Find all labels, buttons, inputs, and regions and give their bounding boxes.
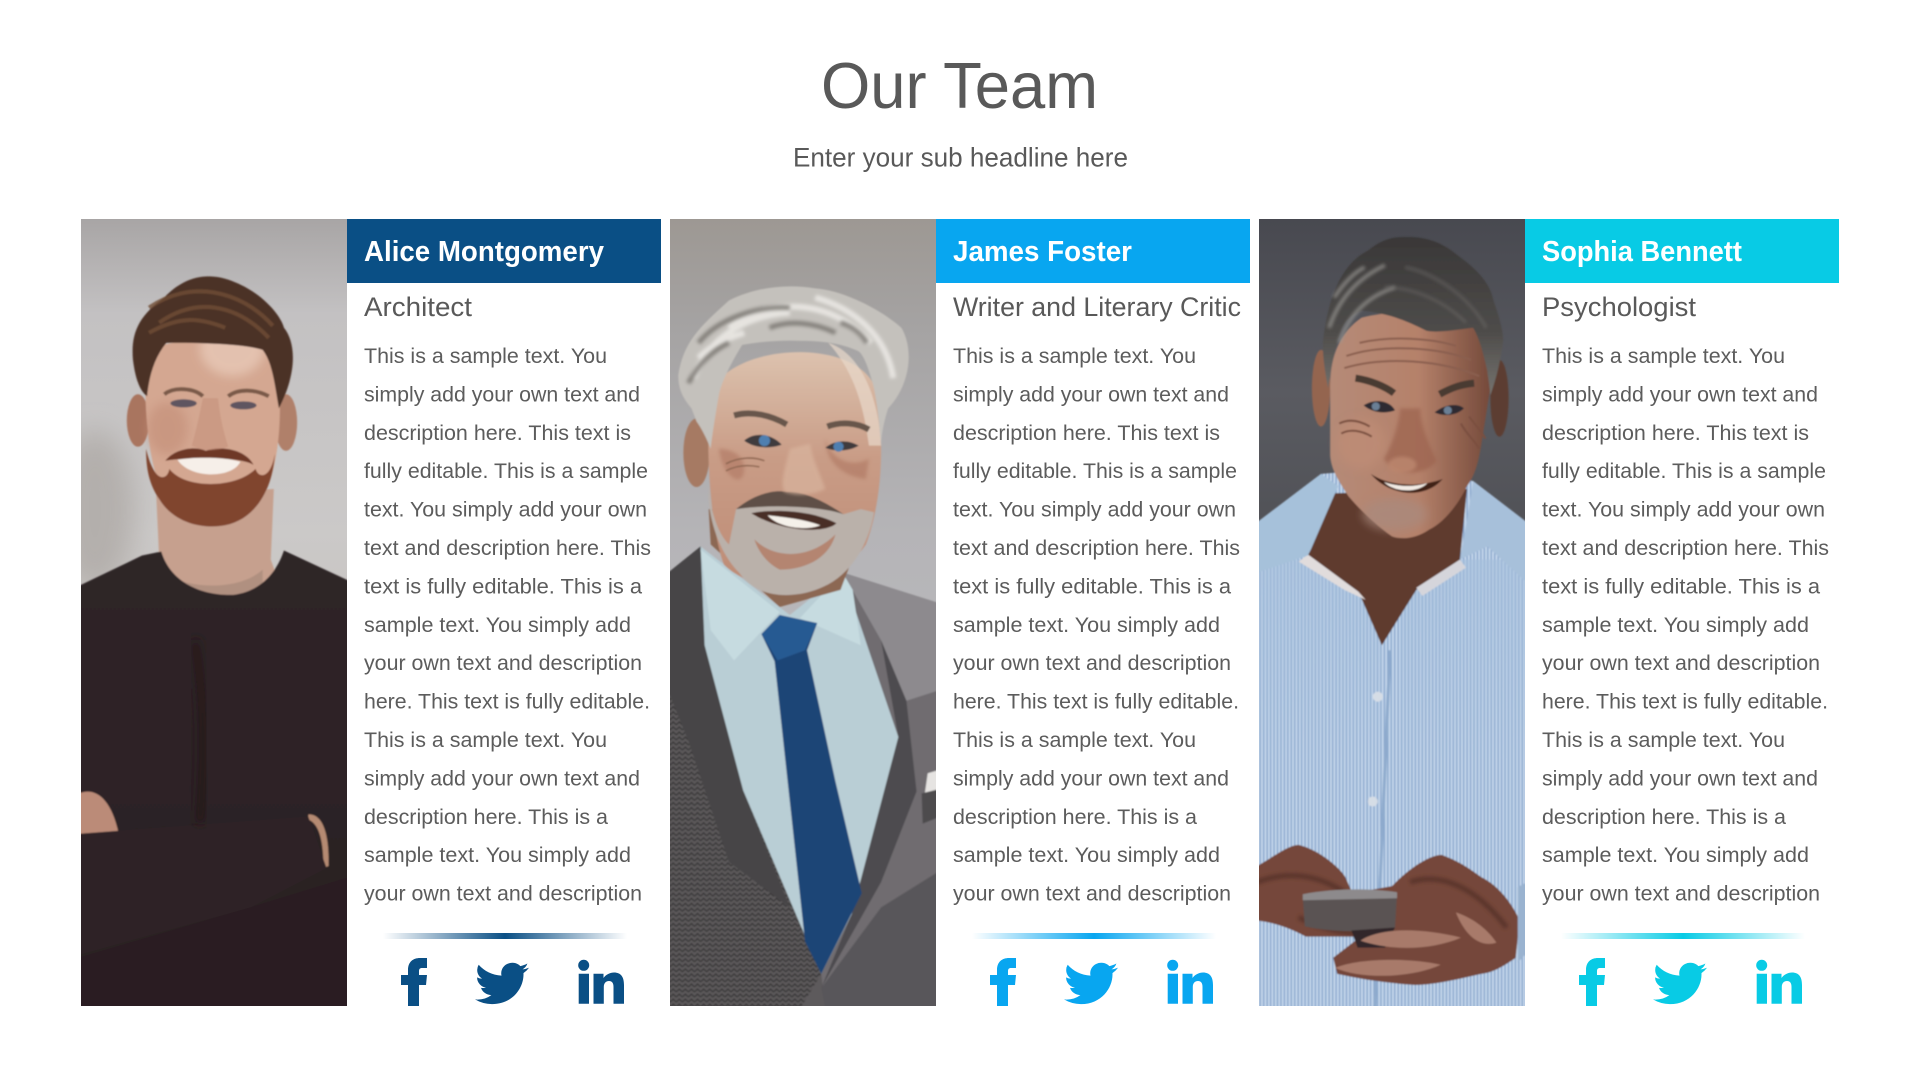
photo: James Foster portrait [668, 219, 938, 1009]
icon: linkedin [578, 960, 624, 1004]
description text: description here. This text is [364, 422, 631, 445]
description text: text is fully editable. This is a [953, 575, 1231, 598]
description text: your own text and description [1542, 883, 1820, 906]
description text: fully editable. This is a sample [364, 460, 648, 483]
panel: Alice Montgomery [55, 219, 661, 1009]
name bar: Alice Montgomery [364, 236, 604, 268]
description text: sample text. You simply add [953, 614, 1220, 637]
icon: twitter [475, 963, 529, 1004]
description text: simply add your own text and [1542, 383, 1818, 406]
description text: fully editable. This is a sample [953, 460, 1237, 483]
role: Writer and Literary Critic [953, 292, 1241, 322]
description text: sample text. You simply add [1542, 614, 1809, 637]
description text [1542, 345, 1829, 906]
description text: text is fully editable. This is a [1542, 575, 1820, 598]
description text: here. This text is fully editable. [1542, 691, 1828, 714]
description text: This is a sample text. You [364, 729, 607, 752]
name bar [347, 219, 661, 283]
description text: description here. This text is [1542, 422, 1809, 445]
description text: description here. This is a [953, 806, 1197, 829]
description text: your own text and description [953, 883, 1231, 906]
icon: facebook [401, 958, 427, 1006]
icon: facebook [1579, 958, 1605, 1006]
description text [364, 345, 651, 906]
description text: your own text and description [364, 883, 642, 906]
name bar [1525, 219, 1839, 283]
description text: here. This text is fully editable. [953, 691, 1239, 714]
description text: fully editable. This is a sample [1542, 460, 1826, 483]
description text: your own text and description [1542, 652, 1820, 675]
description text: This is a sample text. You [1542, 345, 1785, 368]
description text: text is fully editable. This is a [364, 575, 642, 598]
subtitle: Enter your sub headline here [793, 142, 1128, 172]
icon: linkedin [1167, 960, 1213, 1004]
description text: This is a sample text. You [1542, 729, 1785, 752]
icon: linkedin [1756, 960, 1802, 1004]
description text: This is a sample text. You [953, 729, 1196, 752]
icon: facebook [990, 958, 1016, 1006]
description text: simply add your own text and [364, 383, 640, 406]
description text: text and description here. This [1542, 537, 1829, 560]
title: Our Team [821, 49, 1098, 122]
description text: sample text. You simply add [364, 614, 631, 637]
description text: simply add your own text and [953, 383, 1229, 406]
description text: simply add your own text and [953, 767, 1229, 790]
icon: twitter [1064, 963, 1118, 1004]
description text: your own text and description [953, 652, 1231, 675]
description text: simply add your own text and [1542, 767, 1818, 790]
description text: description here. This is a [1542, 806, 1786, 829]
description text: sample text. You simply add [1542, 844, 1809, 867]
photo: Alice Montgomery portrait [55, 219, 349, 1009]
description text: text and description here. This [364, 537, 651, 560]
description text [953, 345, 1240, 906]
name bar [936, 219, 1250, 283]
description text: simply add your own text and [364, 767, 640, 790]
description text: sample text. You simply add [953, 844, 1220, 867]
description text: description here. This text is [953, 422, 1220, 445]
photo: Sophia Bennett portrait [1257, 219, 1527, 1009]
role: Psychologist [1542, 292, 1697, 322]
role: Architect [364, 292, 473, 322]
panel: James Foster [668, 219, 1250, 1009]
description text: your own text and description [364, 652, 642, 675]
icon: twitter [1653, 963, 1707, 1004]
description text: text and description here. This [953, 537, 1240, 560]
description text: This is a sample text. You [364, 345, 607, 368]
description text: This is a sample text. You [953, 345, 1196, 368]
description text: text. You simply add your own [953, 499, 1236, 522]
description text: description here. This is a [364, 806, 608, 829]
description text: text. You simply add your own [364, 499, 647, 522]
panel: Sophia Bennett [1257, 219, 1839, 1009]
description text: text. You simply add your own [1542, 499, 1825, 522]
description text: sample text. You simply add [364, 844, 631, 867]
name bar: James Foster [953, 236, 1132, 268]
name bar: Sophia Bennett [1542, 236, 1742, 268]
description text: here. This text is fully editable. [364, 691, 650, 714]
